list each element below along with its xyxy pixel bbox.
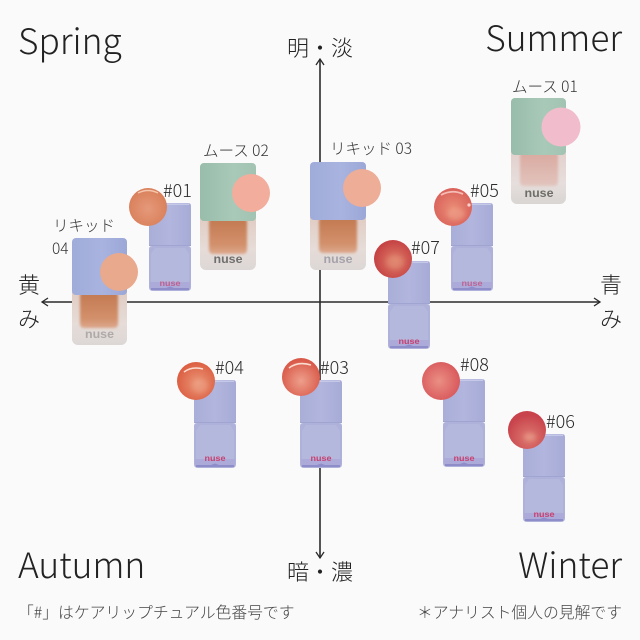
product: ムース 01: ムース 01 bbox=[512, 75, 578, 97]
axis label: top: 明・淡 bbox=[287, 31, 353, 63]
product: #04 bbox=[177, 354, 244, 468]
footnote: analyst disclaimer: ＊アナリスト個人の見解です bbox=[417, 600, 622, 623]
product: #01: #01 bbox=[163, 177, 192, 203]
product: #05 bbox=[434, 177, 499, 291]
heading: Spring: Spring bbox=[18, 14, 122, 65]
product: #06: nuse bbox=[534, 509, 555, 519]
product: #08: #08 bbox=[460, 351, 489, 377]
product: リキッド 04: 04 bbox=[52, 237, 69, 259]
product: #07: #07 bbox=[411, 234, 440, 260]
product: #03: nuse bbox=[310, 453, 332, 463]
product: ムース 02: ムース 02 bbox=[203, 139, 269, 161]
product: #04: #04 bbox=[215, 354, 244, 380]
product: リキッド 04 bbox=[52, 214, 138, 345]
heading: Winter: Winter bbox=[518, 538, 622, 589]
product: リキッド 03: リキッド 03 bbox=[330, 137, 412, 159]
product: #08 bbox=[422, 351, 489, 467]
product: #07 bbox=[374, 234, 440, 349]
product: リキッド 03 bbox=[310, 137, 412, 270]
product: #07: nuse bbox=[398, 336, 420, 346]
product: #04: nuse bbox=[204, 453, 226, 463]
horizontal axis arrow: yellow to blue bbox=[42, 298, 600, 306]
product: #08: nuse bbox=[454, 453, 475, 463]
heading: Summer: Summer bbox=[485, 11, 622, 62]
axis label: left: み bbox=[18, 302, 40, 334]
product: ムース 01 bbox=[511, 75, 580, 204]
product: #01 bbox=[129, 177, 192, 291]
product: #05: nuse bbox=[462, 278, 483, 288]
footnote: colour number note: 「#」はケアリップチュアル色番号です bbox=[18, 600, 295, 623]
product: #06: #06 bbox=[546, 408, 575, 434]
product: #03: #03 bbox=[320, 354, 349, 380]
product: リキッド 03: nuse bbox=[324, 252, 353, 266]
product: #05: #05 bbox=[470, 177, 499, 203]
product: リキッド 04: リキッド bbox=[53, 214, 115, 236]
axis label: right: み bbox=[600, 302, 622, 334]
axis label: bottom: 暗・濃 bbox=[287, 555, 353, 587]
product: #01: nuse bbox=[160, 278, 181, 288]
product: ムース 02: nuse bbox=[214, 252, 243, 266]
vertical axis arrow: light to dark bbox=[316, 59, 324, 558]
heading: Autumn: Autumn bbox=[18, 538, 145, 589]
product: リキッド 04: nuse bbox=[85, 327, 114, 341]
product: ムース 02 bbox=[200, 139, 270, 270]
axis label: right: 青 bbox=[600, 268, 622, 300]
product: #03 bbox=[282, 354, 349, 468]
product: #06 bbox=[508, 408, 575, 522]
axis label: left: 黄 bbox=[18, 268, 40, 300]
product: ムース 01: nuse bbox=[524, 186, 554, 200]
